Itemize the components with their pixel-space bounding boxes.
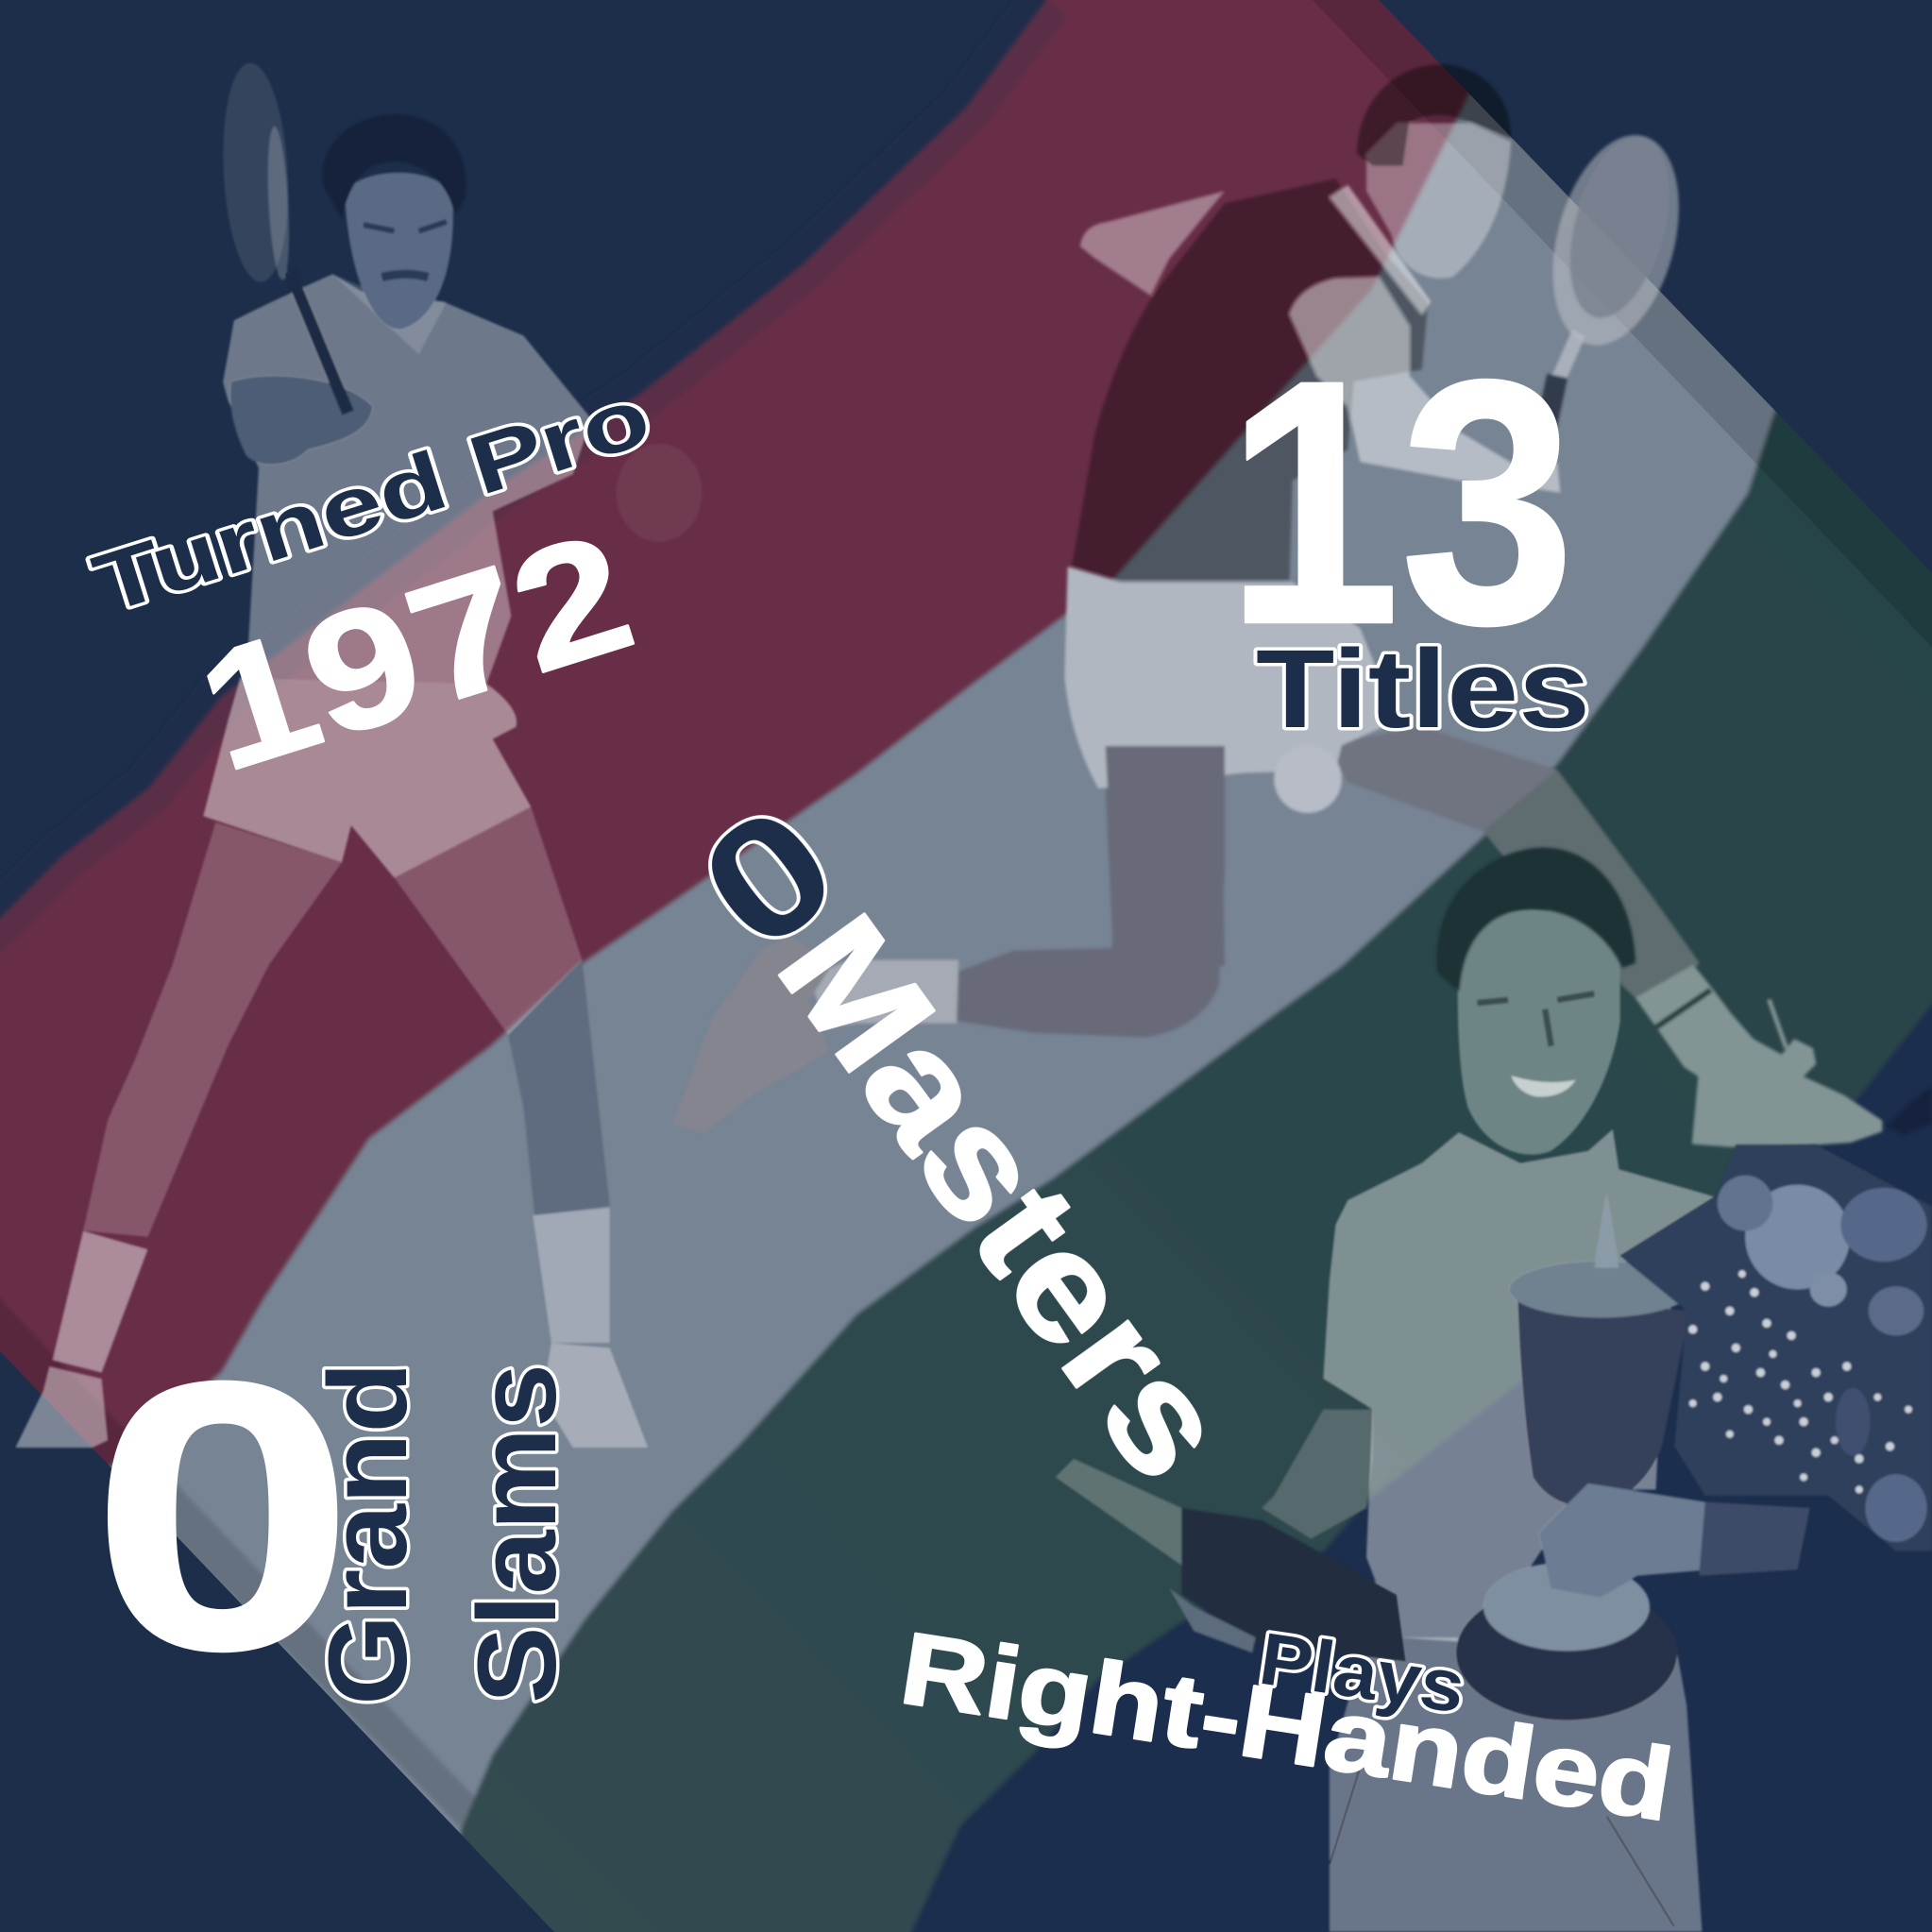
left shoe bbox=[15, 1366, 108, 1448]
player hair, trophy photo bbox=[1436, 848, 1635, 991]
left sock bbox=[52, 1230, 148, 1373]
ribbon edge strip, upper right bbox=[1313, 0, 1932, 661]
shoe bbox=[672, 937, 833, 1134]
right shoe bbox=[542, 1343, 648, 1448]
forearm and hand bbox=[230, 376, 373, 465]
collar bbox=[1330, 185, 1431, 314]
racket head bbox=[218, 61, 294, 283]
face features bbox=[364, 222, 447, 278]
0 value, Masters: 0 bbox=[667, 769, 870, 986]
arm left bbox=[1262, 1410, 1373, 1539]
hair bbox=[1357, 64, 1511, 166]
shoelace bbox=[1769, 999, 1787, 1048]
shirt bbox=[223, 274, 591, 684]
sock stripe bbox=[1655, 990, 1711, 1027]
bent lower leg bbox=[957, 746, 1225, 1038]
ribbon edge strip, lower left bbox=[0, 1299, 476, 1828]
right shin on grey bbox=[508, 959, 610, 1215]
back arm bbox=[1080, 191, 1225, 296]
13 value: 13 bbox=[1226, 308, 1575, 696]
bouquet bbox=[1618, 1144, 1932, 1551]
Plays label: Plays bbox=[1255, 1617, 1470, 1729]
head bbox=[1458, 909, 1620, 1155]
dark shape at right edge bbox=[1886, 1086, 1932, 1135]
photo: player forehand bbox=[83, 61, 703, 1237]
right thigh on red bbox=[394, 807, 582, 1035]
grey band bbox=[108, 93, 1777, 1836]
blurred hand bbox=[616, 444, 703, 542]
trophy bbox=[1456, 1194, 1810, 1720]
vest bbox=[1071, 178, 1428, 582]
Grand label: Grand bbox=[306, 1362, 431, 1705]
Slams label: Slams bbox=[455, 1364, 580, 1703]
Titles label: Titles bbox=[1256, 627, 1590, 752]
thigh to the right bbox=[1323, 727, 1699, 966]
lower navy area bbox=[888, 944, 1932, 1932]
sock bbox=[810, 960, 958, 1028]
bottle bbox=[1056, 1459, 1406, 1662]
right sock bbox=[533, 1208, 610, 1343]
shoe and sock bbox=[1635, 965, 1882, 1149]
sleeve and arm bbox=[1289, 278, 1560, 493]
smile bbox=[1511, 1076, 1576, 1096]
calf right bbox=[1483, 770, 1700, 998]
shorts bbox=[203, 678, 531, 878]
red band darker edge bbox=[0, 0, 1046, 935]
pants bbox=[1330, 1637, 1702, 1932]
1972 value: 1972 bbox=[179, 497, 652, 806]
photo: player with trophy bbox=[1056, 909, 1932, 1932]
hair bbox=[323, 114, 466, 219]
shirt bbox=[1323, 1129, 1723, 1644]
shorts bbox=[1064, 567, 1398, 788]
ball bbox=[1274, 745, 1342, 813]
face bbox=[1366, 123, 1511, 279]
racket bbox=[1532, 121, 1701, 462]
head bbox=[345, 173, 453, 330]
pants seams bbox=[1330, 1767, 1674, 1927]
green band bbox=[415, 359, 1932, 1932]
photo: player socks and shoes bbox=[15, 1208, 648, 1448]
Masters label: Masters bbox=[746, 886, 1263, 1509]
thigh downwards bbox=[1105, 770, 1225, 966]
red band bbox=[0, 0, 1471, 1467]
racket handle bbox=[290, 271, 348, 413]
collar bbox=[332, 274, 447, 354]
Turned Pro label: Turned Pro bbox=[83, 368, 660, 631]
0 value, Grand Slams: 0 bbox=[91, 1302, 355, 1729]
left leg bbox=[83, 822, 342, 1237]
eyes and nose bbox=[1477, 993, 1594, 1046]
photo: player running backhand bbox=[672, 64, 1932, 1149]
Right-Handed value: Right-Handed bbox=[893, 1610, 1680, 1842]
